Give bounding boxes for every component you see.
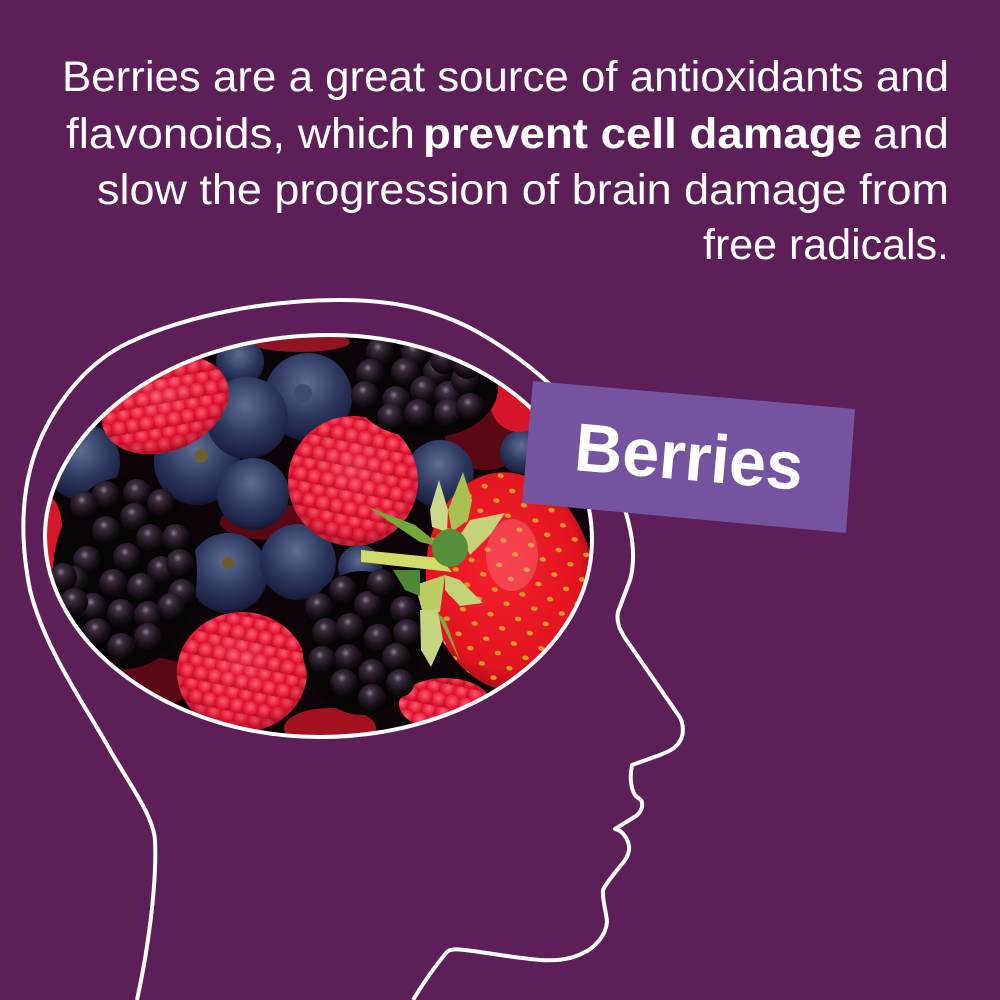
intro text: free radicals. xyxy=(703,221,949,269)
berries photo in brain oval xyxy=(37,330,609,748)
intro text xyxy=(62,53,949,269)
strawberry xyxy=(426,472,590,688)
label: Berries: Berries xyxy=(572,409,806,505)
intro text: slow the progression of brain damage from xyxy=(97,166,949,214)
intro text: Berries are a great source of antioxidants and xyxy=(62,53,949,101)
blackberry top xyxy=(351,338,498,438)
strawberry highlight xyxy=(486,519,538,591)
blackberry left xyxy=(49,477,197,669)
intro text: flavonoids, which xyxy=(66,110,415,158)
blueberries xyxy=(44,338,544,613)
intro text: prevent cell damage xyxy=(423,110,862,158)
raspberry top right and lower xyxy=(491,384,530,432)
oval outline xyxy=(45,335,592,737)
raspberry centre xyxy=(288,416,418,546)
head silhouette outline xyxy=(23,300,683,1000)
label: Berries xyxy=(522,381,855,533)
raspberry bottom xyxy=(177,612,307,732)
intro text: and xyxy=(873,110,949,158)
blueberry crowns xyxy=(194,384,312,569)
dark red background berries xyxy=(37,332,525,748)
blackberry bottom xyxy=(302,569,422,715)
raspberry top left xyxy=(102,358,229,454)
strawberry calyx xyxy=(361,472,505,667)
